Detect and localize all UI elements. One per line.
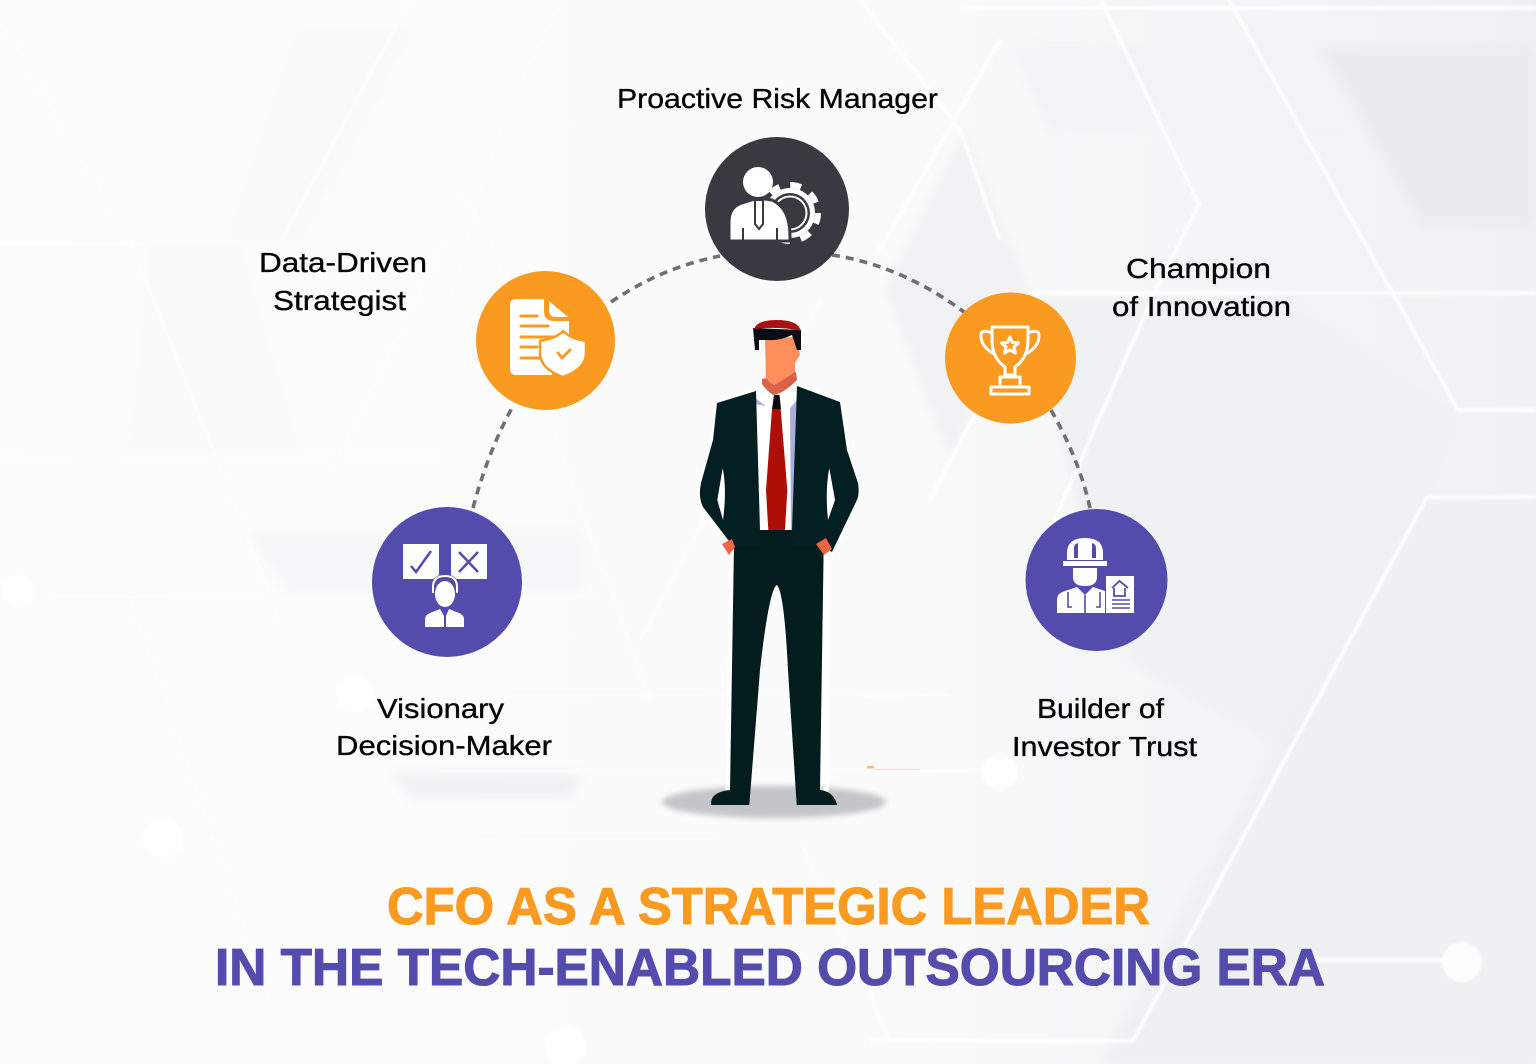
dashed arc connecting the five roles [473, 255, 1090, 508]
trousers [711, 530, 837, 805]
role: Data-Driven Strategist [259, 247, 615, 410]
node circle: dark [705, 137, 849, 281]
role: Builder of Investor Trust [1012, 509, 1197, 762]
jacket right [792, 386, 859, 552]
label: Builder of Investor Trust: Investor Trust [1012, 731, 1197, 762]
neck [762, 372, 797, 395]
title [215, 878, 1325, 997]
jacket left [700, 391, 760, 547]
tie knot [772, 395, 781, 409]
icon: trophy [981, 327, 1039, 394]
icon: engineer with house document [1057, 538, 1134, 613]
label: Builder of Investor Trust [1012, 693, 1197, 762]
label: Visionary Decision-Maker: Visionary [377, 693, 504, 724]
role: Proactive Risk Manager [617, 83, 938, 281]
hair top red [754, 320, 801, 331]
label: Visionary Decision-Maker [336, 693, 552, 761]
label: Champion of Innovation: of Innovation [1112, 291, 1291, 322]
node circle: orange [945, 292, 1076, 424]
hands in pockets [722, 538, 832, 555]
label: Data-Driven Strategist [259, 247, 427, 316]
label: Data-Driven Strategist: Data-Driven [259, 247, 427, 278]
node circle: purple [372, 507, 522, 657]
label: Data-Driven Strategist: Strategist [273, 285, 406, 316]
icon: document with shield [510, 299, 586, 377]
label: Visionary Decision-Maker: Decision-Maker [336, 730, 552, 761]
tie [766, 409, 787, 530]
icon: decision maker [403, 544, 487, 627]
figure: CFO in suit [662, 320, 886, 818]
node circle: orange [476, 271, 615, 410]
role: Visionary Decision-Maker [336, 507, 552, 761]
label: Champion of Innovation [1112, 253, 1291, 322]
white halo [699, 386, 859, 790]
shirt [755, 384, 797, 530]
stray orange artifact [867, 766, 920, 770]
face [765, 337, 800, 385]
node circle: purple [1026, 509, 1168, 651]
role: Champion of Innovation [945, 253, 1291, 424]
shadow under figure [662, 786, 886, 818]
label: Proactive Risk Manager: Proactive Risk Manager [617, 83, 938, 114]
icon: manager with gear [729, 167, 818, 241]
label: Builder of Investor Trust: Builder of [1037, 693, 1164, 724]
title line 2: IN THE TECH-ENABLED OUTSOURCING ERA [215, 939, 1325, 997]
label: Champion of Innovation: Champion [1126, 253, 1271, 284]
hair black [753, 328, 801, 350]
title line 1: CFO AS A STRATEGIC LEADER [387, 878, 1150, 936]
shirt shadow [790, 400, 797, 530]
